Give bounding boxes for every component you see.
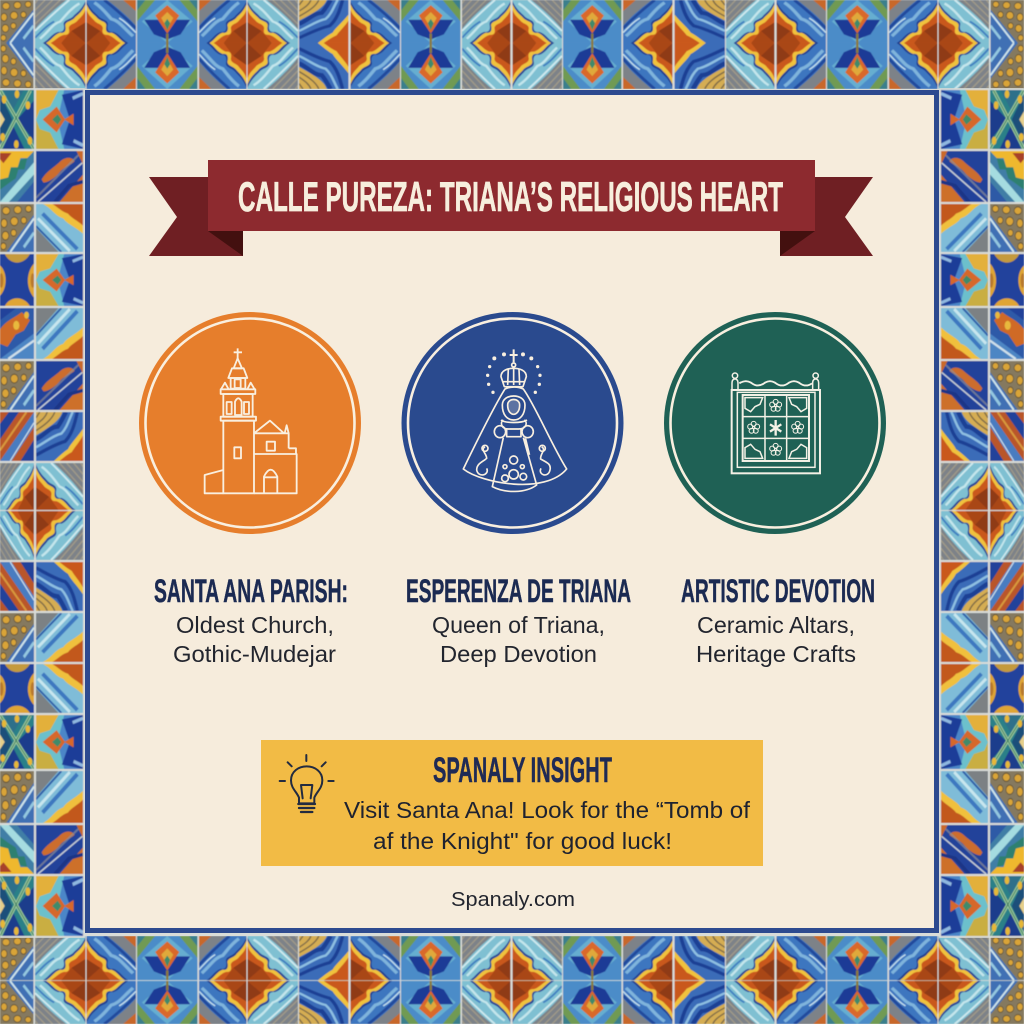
text block: Esperanza de Triana: Deep Devotion <box>440 641 597 667</box>
tile border: left column <box>0 88 85 938</box>
footer: website: Spanaly.com <box>451 888 575 911</box>
panel: Santa Ana circle <box>139 312 361 534</box>
icon: light bulb <box>280 755 334 812</box>
text block: Artistic Devotion <box>681 573 875 667</box>
text block: Artistic Devotion: Heritage Crafts <box>696 641 856 667</box>
text block: Santa Ana Parish: Oldest Church, <box>176 612 334 638</box>
callout: Spanaly Insight: af the Knight" for good luck! <box>373 828 672 854</box>
ribbon right tail <box>780 177 873 256</box>
text block: Artistic Devotion: Ceramic Altars, <box>697 612 855 638</box>
text block: Esperanza de Triana <box>406 573 631 667</box>
panel: Esperanza circle <box>402 312 624 534</box>
ribbon main band <box>208 160 815 231</box>
callout: Spanaly Insight <box>261 740 763 866</box>
panel: Artistic Devotion circle <box>664 312 886 534</box>
icon: church <box>205 348 297 493</box>
text block: Esperanza de Triana: Queen of Triana, <box>432 612 605 638</box>
ribbon right fold <box>780 231 815 256</box>
panel: cream content area <box>88 92 936 930</box>
callout heading: SPANALY INSIGHT <box>433 751 612 790</box>
text block: Santa Ana Parish <box>154 573 348 667</box>
tile border: bottom band <box>0 936 1024 1024</box>
text block: Santa Ana Parish: SANTA ANA PARISH: <box>154 573 348 609</box>
title ribbon <box>149 160 873 256</box>
tile border: top band <box>0 0 1024 89</box>
tile border: right column <box>939 88 1024 938</box>
text block: Santa Ana Parish: Gothic-Mudejar <box>173 641 336 667</box>
text block: Esperanza de Triana: ESPERENZA DE TRIANA <box>406 573 631 609</box>
callout body: Visit Santa Ana! Look for the “Tomb of <box>344 797 750 823</box>
text block: Artistic Devotion: ARTISTIC DEVOTION <box>681 573 875 609</box>
ribbon left fold <box>208 231 243 256</box>
ribbon left tail <box>149 177 243 256</box>
icon: Virgin of Esperanza <box>463 349 567 491</box>
icon: ceramic tile altar <box>732 373 820 473</box>
